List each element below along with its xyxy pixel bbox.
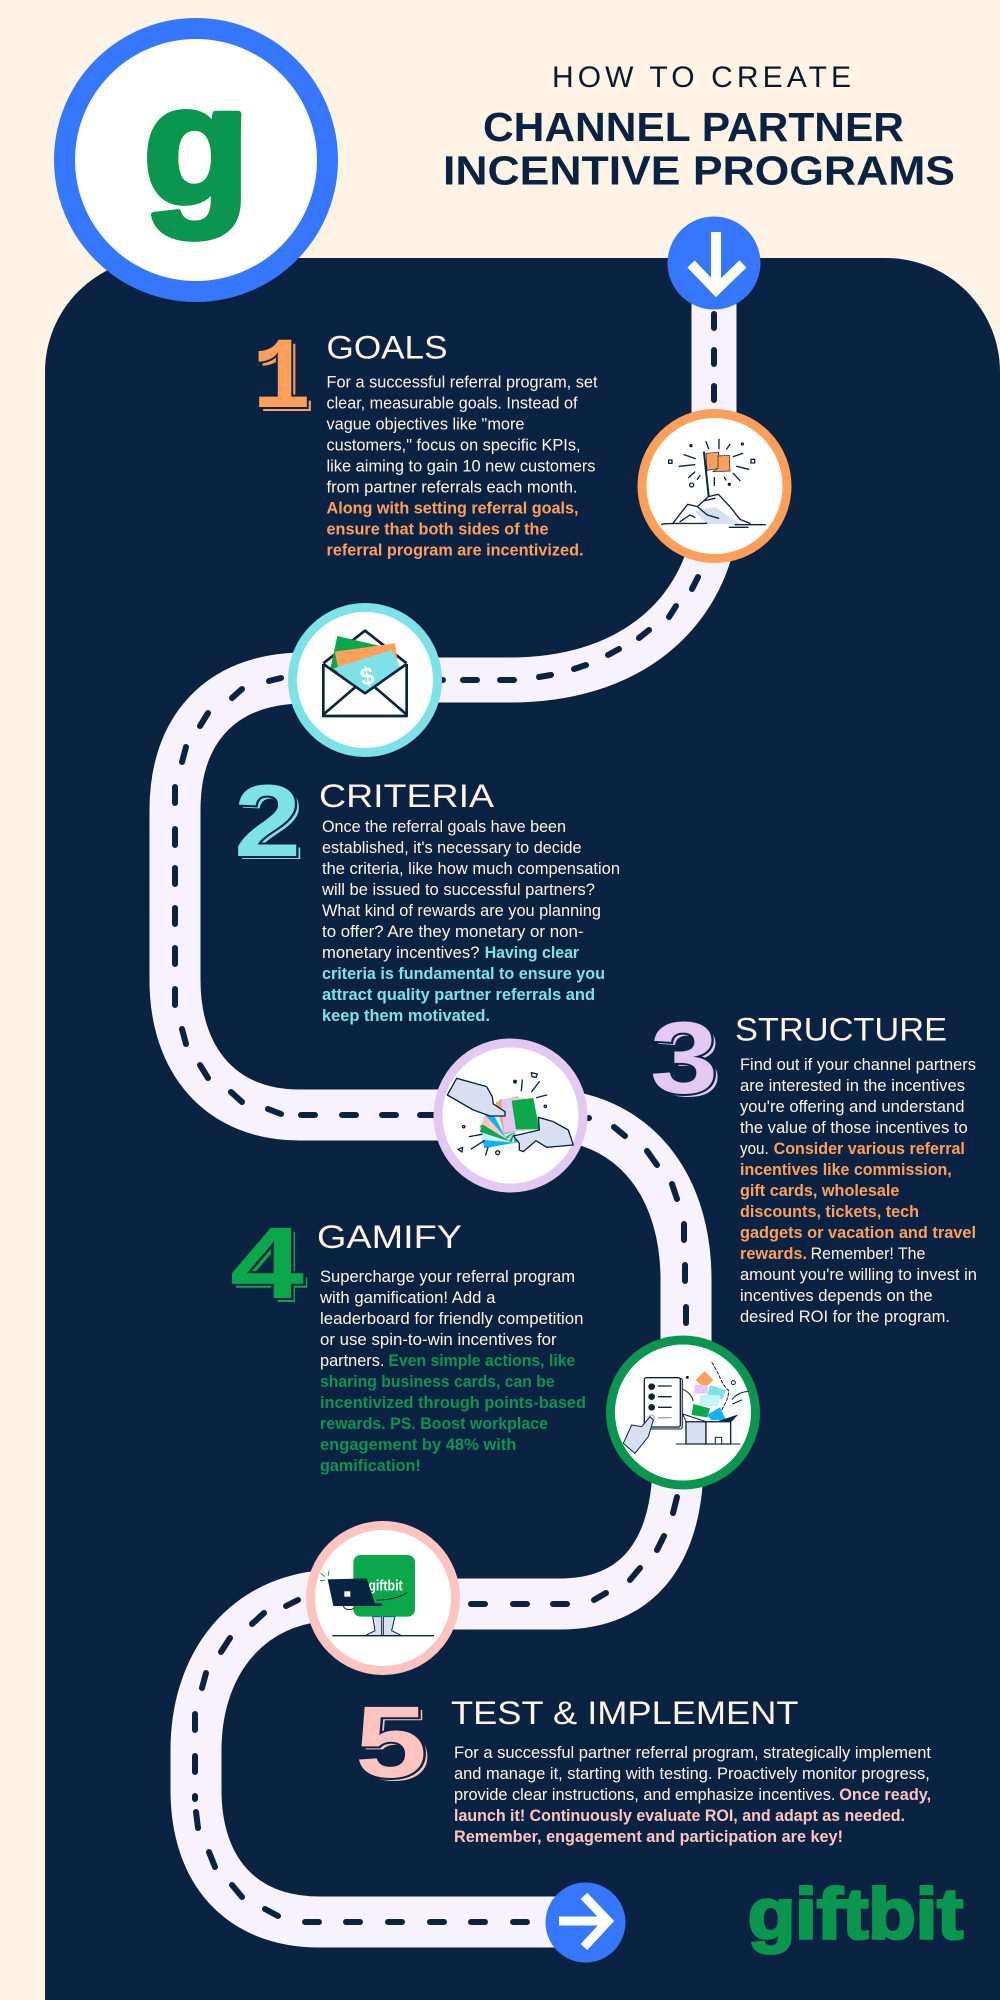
body text: goals: ensure that both sides of the (326, 520, 548, 538)
body text: criteria: attract quality partner referrals and (322, 986, 595, 1004)
body text: test and implement: For a successful partner referral program, strategically implement (454, 1744, 931, 1762)
body text: structure (740, 1056, 977, 1326)
body text: criteria: What kind of rewards are you planning (322, 902, 601, 920)
body text: criteria: Once the referral goals have been (322, 818, 566, 836)
body text: test and implement: Remember, engagement and participation are key! (454, 1828, 843, 1846)
body text: criteria: keep them motivated. (322, 1007, 490, 1025)
body text: gamify: leaderboard for friendly competition (320, 1310, 584, 1328)
title: INCENTIVE PROGRAMS (443, 148, 955, 194)
number 1: 1 (252, 322, 311, 438)
body text: criteria (321, 818, 620, 1025)
body text: structure: are interested in the incentives (740, 1077, 965, 1095)
icon: giftbit card with laptop figure (310, 1526, 456, 1670)
step 4: gamify (230, 1206, 586, 1475)
logo badge: giftbit g (64, 28, 328, 292)
body text: goals: from partner referrals each month. (326, 478, 578, 496)
step 1: goals (252, 322, 598, 560)
body text: structure: desired ROI for the program. (740, 1308, 950, 1326)
step 5: test and implement (355, 1685, 931, 1846)
number 3: 3 (654, 1004, 722, 1118)
number 5: 5 (355, 1685, 427, 1799)
number 3: 3 (650, 1001, 718, 1115)
body text: test and implement (454, 1744, 931, 1846)
step 2: criteria (234, 764, 620, 1025)
body text: structure: Consider various referral (774, 1140, 965, 1158)
road centre dashes (175, 314, 714, 1922)
title: CHANNEL PARTNER (483, 104, 904, 150)
body text: test and implement: Once ready, (839, 1786, 931, 1804)
icon: goal flag on mountain (642, 414, 787, 558)
body text: structure: Remember! The (811, 1245, 925, 1263)
heading: gamify: GAMIFY (317, 1219, 462, 1255)
body text: structure: gadgets or vacation and travel (740, 1224, 976, 1242)
body text: criteria: the criteria, like how much compensation (322, 860, 620, 878)
icon: checklist and open box (610, 1340, 756, 1485)
body text: test and implement: launch it! Continuously evaluate ROI, and adapt as needed. (454, 1807, 905, 1825)
body text: structure: discounts, tickets, tech (740, 1203, 919, 1221)
body text: criteria: criteria is fundamental to ensure you (322, 965, 605, 983)
heading: goals: GOALS (326, 330, 448, 366)
body text: structure: incentives depends on the (740, 1287, 933, 1305)
body text: structure: the value of those incentives to (740, 1119, 968, 1137)
title: HOW TO CREATE (552, 61, 851, 94)
body text: gamify: or use spin-to-win incentives for (320, 1331, 557, 1349)
number 2: 2 (238, 767, 305, 881)
logo badge: giftbit g: g (143, 50, 250, 239)
body text: structure: Find out if your channel partners (740, 1056, 976, 1074)
body text: structure: gift cards, wholesale (740, 1182, 899, 1200)
heading: test and implement: TEST & IMPLEMENT (451, 1695, 798, 1731)
body text: gamify: incentivized through points-based (320, 1394, 586, 1412)
body text: goals: customers," focus on specific KPIs, (326, 436, 580, 454)
number 4: 4 (234, 1210, 308, 1324)
icon: envelope with gift cards: $ (358, 662, 377, 692)
body text: criteria: Having clear (485, 944, 580, 962)
body text: structure: rewards. (740, 1245, 807, 1263)
number 5: 5 (359, 1688, 431, 1802)
step 3: structure (650, 1001, 977, 1326)
icon: giftbit card with laptop figure: giftbit (368, 1579, 403, 1595)
body text: structure: amount you're willing to invest in (740, 1266, 977, 1284)
body text: structure: incentives like commission, (740, 1161, 952, 1179)
body text: structure: you. (740, 1140, 769, 1158)
body text: goals: clear, measurable goals. Instead of (326, 394, 578, 412)
body text: gamify: engagement by 48% with (320, 1436, 516, 1454)
body text: gamify (319, 1268, 586, 1475)
body text: goals: referral program are incentivized. (326, 542, 584, 560)
body text: gamify: Even simple actions, like (388, 1352, 575, 1370)
end arrow button (546, 1882, 626, 1962)
number 4 (230, 1206, 308, 1324)
body text: gamify: rewards. PS. Boost workplace (320, 1415, 548, 1433)
number 2: 2 (234, 764, 301, 878)
body text: criteria: established, it's necessary to decide (322, 839, 582, 857)
winding road (175, 263, 714, 1922)
giftbit wordmark: giftbit (748, 1876, 963, 1954)
body text: goals: vague objectives like "more (326, 416, 524, 434)
heading: structure: STRUCTURE (735, 1012, 947, 1048)
body text: goals: Along with setting referral goals, (326, 500, 578, 518)
body text: goals (326, 374, 598, 560)
heading: criteria: CRITERIA (319, 778, 495, 814)
title (443, 61, 955, 194)
start arrow button (668, 216, 760, 310)
body text: test and implement: and manage it, starting with testing. Proactively monitor progress, (454, 1765, 930, 1783)
body text: gamify: with gamification! Add a (319, 1289, 496, 1307)
body text: criteria: to offer? Are they monetary or non- (322, 923, 584, 941)
body text: criteria: will be issued to successful partners? (321, 881, 595, 899)
icon: hands exchanging gift cards (438, 1043, 583, 1188)
number 4: 4 (230, 1206, 304, 1320)
body text: gamify: sharing business cards, can be (320, 1373, 555, 1391)
body text: goals: like aiming to gain 10 new customers (326, 458, 596, 476)
icon: envelope with gift cards (292, 608, 438, 752)
body text: gamify: gamification! (320, 1457, 421, 1475)
body text: goals: For a successful referral program, set (326, 374, 598, 392)
body text: gamify: partners. (320, 1352, 384, 1370)
number 1: 1 (256, 326, 315, 442)
body text: criteria: monetary incentives? (322, 944, 480, 962)
body text: structure: you're offering and understand (740, 1098, 964, 1116)
body text: test and implement: provide clear instructions, and emphasize incentives. (454, 1786, 835, 1804)
body text: gamify: Supercharge your referral program (320, 1268, 575, 1286)
